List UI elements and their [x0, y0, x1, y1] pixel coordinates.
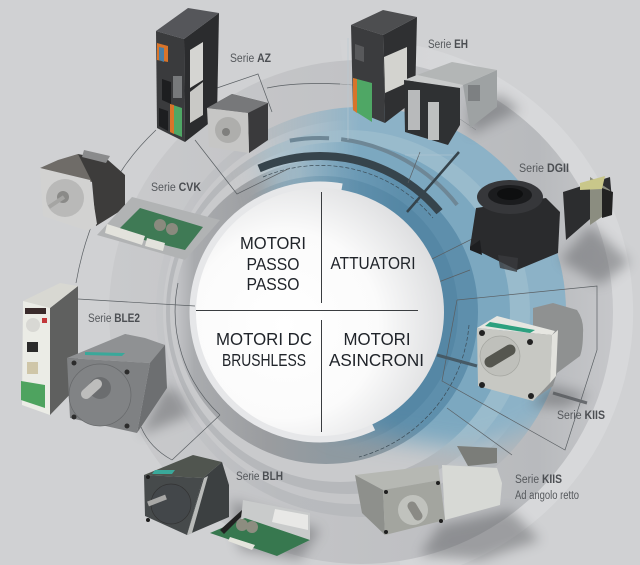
product: BLH motor	[144, 455, 229, 535]
product: KIIS right-angle motor	[355, 446, 502, 535]
soft shadows under products	[140, 95, 630, 560]
label: motori passo passo: MOTORI	[240, 233, 306, 253]
product: CVK motor	[40, 150, 125, 231]
label: serie EH: Serie EH	[428, 39, 468, 51]
product: BLE2 driver	[21, 283, 78, 415]
quadrant dividers	[196, 192, 418, 432]
product: AZ driver	[156, 8, 219, 142]
product: BLH driver board	[210, 500, 310, 556]
label: brushless: BRUSHLESS	[222, 350, 306, 370]
label: motori passo passo: PASSO	[246, 254, 300, 274]
product: DGII rotary actuator	[470, 176, 613, 272]
label: motori: MOTORI	[344, 329, 410, 349]
central disc	[196, 188, 444, 436]
product: CVK driver board	[97, 197, 220, 260]
connector lines and frames	[78, 38, 597, 460]
label: serie BLE2: Serie BLE2	[88, 313, 140, 325]
label: motori passo passo	[240, 233, 306, 294]
label: serie KIIS ad angolo retto	[515, 474, 579, 502]
label: asincroni: ASINCRONI	[329, 350, 424, 370]
product: AZ motor	[207, 94, 268, 153]
label: motori passo passo: PASSO	[246, 274, 300, 294]
label: attuatori: ATTUATORI	[330, 253, 416, 273]
label: serie AZ: Serie AZ	[230, 53, 271, 65]
light halo of central disc	[193, 185, 447, 439]
label: serie KIIS: Serie KIIS	[557, 410, 605, 422]
product: BLE2 motor	[67, 334, 167, 433]
dark arcs	[76, 84, 494, 486]
product: EH actuator	[404, 62, 497, 145]
blue segment of the rings	[255, 107, 566, 460]
label: serie BLH: Serie BLH	[236, 471, 283, 483]
label: motori dc: MOTORI DC	[216, 329, 312, 349]
label: serie CVK: Serie CVK	[151, 182, 202, 194]
product: EH driver	[351, 10, 417, 123]
label: serie KIIS ad angolo retto: Ad angolo retto	[515, 490, 579, 502]
product: KIIS motor	[477, 303, 583, 401]
label: serie KIIS ad angolo retto: Serie KIIS	[515, 474, 562, 486]
label: serie DGII: Serie DGII	[519, 163, 569, 175]
concentric ring background	[109, 40, 633, 565]
